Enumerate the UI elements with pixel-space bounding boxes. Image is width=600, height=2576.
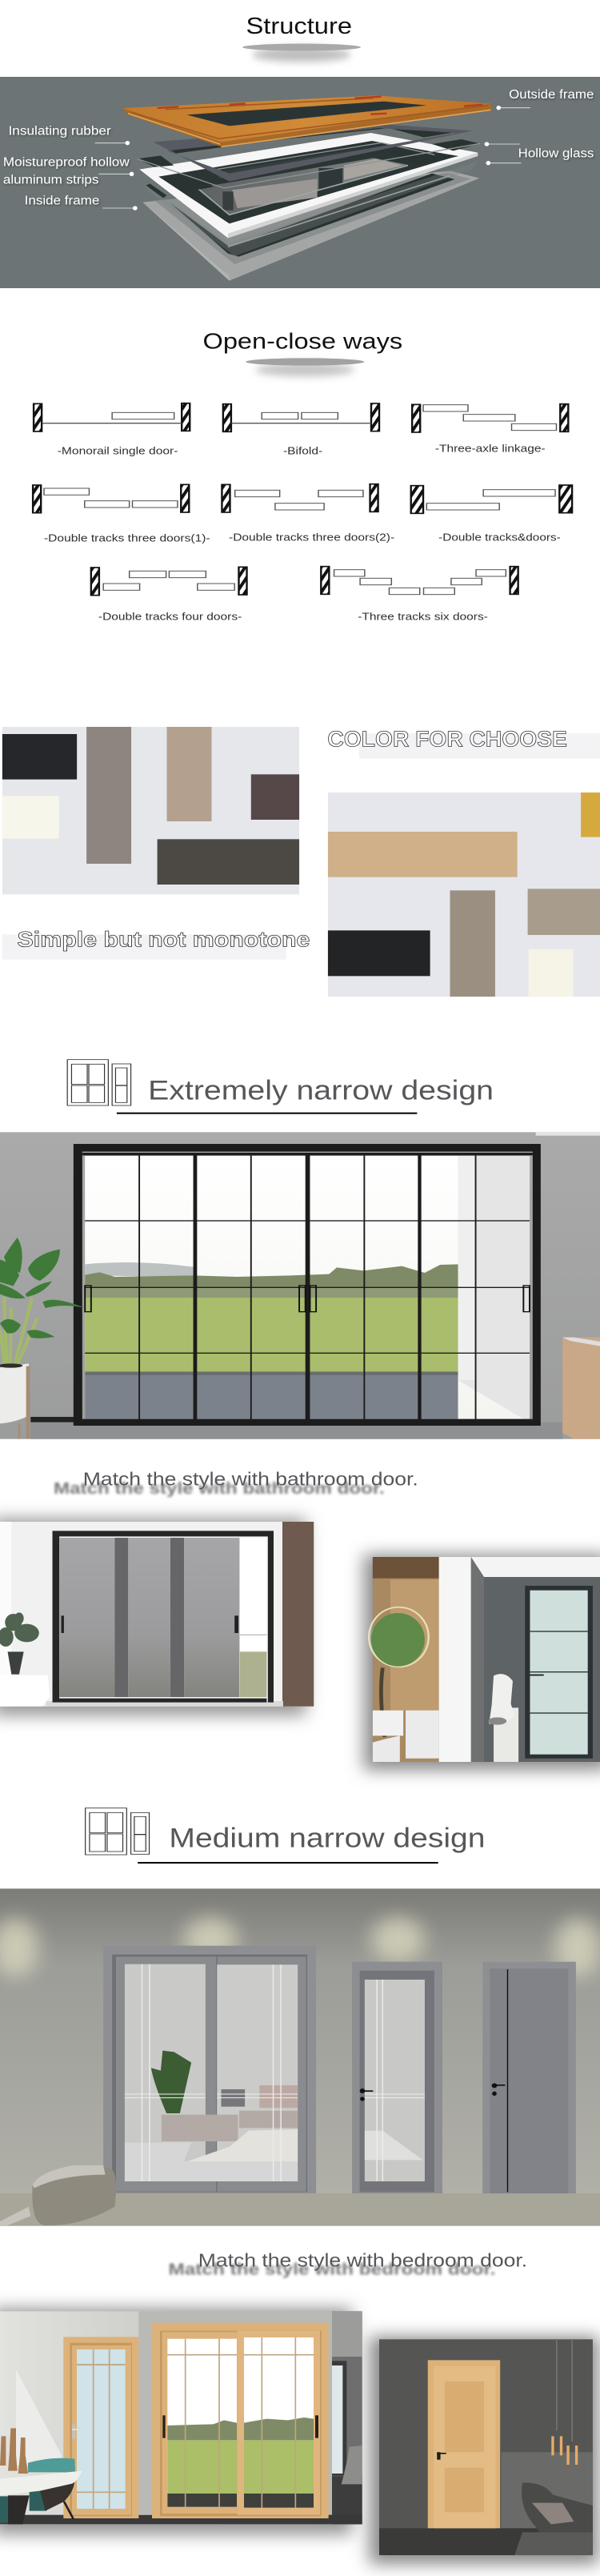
diagram: double tracks and doors: -Double tracks&doors- [438, 532, 561, 544]
icon: door and window [86, 1808, 150, 1855]
label: Moistureproof hollow aluminum strips: Moistureproof hollow [3, 155, 130, 169]
underline [138, 1862, 438, 1864]
photo: wood doors dining room [0, 2311, 362, 2524]
window view [85, 1156, 530, 1419]
label band: simple but not monotone [2, 934, 286, 960]
armchair [514, 2483, 593, 2555]
label: Outside frame [496, 88, 594, 110]
diagram: monorail single door: -Monorail single door- [58, 445, 178, 457]
heading: Simple but not monotone: Simple but not monotone [18, 927, 310, 951]
photo: hallway bathroom door [369, 1557, 600, 1762]
title: Structure: Structure [246, 14, 352, 39]
diagram: double tracks three doors 1 [33, 484, 210, 544]
door frame [74, 1144, 541, 1426]
photo shadow [370, 2336, 599, 2564]
carpet floor [0, 2193, 600, 2226]
diagram: double tracks four doors [91, 567, 247, 623]
upper hollow glass layer [138, 139, 480, 192]
panel: right swatches [328, 792, 600, 997]
photo shadow [0, 2308, 352, 2535]
photo: black sliding door [0, 1132, 600, 1439]
diagram: double tracks three doors 2 [222, 484, 394, 544]
door handles [85, 1286, 530, 1312]
label: Hollow glass [485, 142, 594, 165]
caption: bathroom door: Match the style with bathroom door. [83, 1469, 418, 1490]
diagram: exploded frame layers [122, 95, 492, 281]
blanket [342, 2446, 362, 2484]
reflected caption shadow: Match the style with bedroom door. [168, 2261, 495, 2279]
sliding wood door [152, 2323, 329, 2518]
insulating rubber layer [154, 124, 472, 182]
diagram: double tracks three doors 2: -Double tracks three doors(2)- [229, 532, 394, 544]
double sliding door [103, 1946, 316, 2194]
diagram: monorail single door [34, 403, 190, 457]
section: bathroom door match [0, 1469, 600, 1855]
inside frame layer [142, 171, 479, 281]
section: medium narrow photo [0, 1862, 600, 2226]
label: Inside frame: Inside frame [25, 195, 99, 208]
diagram: three-axle linkage [412, 404, 568, 455]
underline [117, 1113, 417, 1114]
photo: gray doors on wall [0, 1888, 600, 2226]
diagram: bifold: -Bifold- [283, 445, 322, 457]
single glass door [352, 1962, 442, 2194]
caption: bedroom door: Match the style with bedroom door. [198, 2250, 527, 2271]
single glass door [63, 2337, 138, 2518]
reflected caption shadow: Match the style with bathroom door. [54, 1480, 385, 1498]
diagram: double tracks and doors [411, 485, 572, 544]
title ellipse shadow [242, 43, 361, 62]
heading: Medium narrow design: Medium narrow design [169, 1823, 486, 1853]
title ellipse shadow [246, 358, 364, 376]
section: open-close ways [33, 329, 572, 623]
photo: gray sliding door [0, 1522, 314, 1707]
panel: left swatches [2, 727, 299, 894]
plant with planter [0, 1238, 86, 1438]
section: structure [0, 14, 600, 288]
wall spotlights [0, 1917, 600, 1977]
label: Moistureproof hollow aluminum strips [3, 155, 134, 187]
section: colors [2, 727, 600, 997]
pendant lights [551, 2340, 578, 2465]
section: bedroom door match [0, 2250, 599, 2564]
photo: bedroom wood door [379, 2339, 593, 2555]
section: extremely narrow design [0, 1060, 600, 1439]
diagram: three tracks six doors [321, 567, 518, 623]
dining table and chair [0, 2428, 82, 2524]
icon: door and window [67, 1060, 131, 1105]
diagram: double tracks four doors: -Double tracks four doors- [98, 611, 242, 623]
panel: exploded frame diagram [0, 77, 600, 288]
statue [488, 1674, 518, 1762]
label: Moistureproof hollow aluminum strips: aluminum strips [3, 173, 98, 187]
frame interior reflection [158, 141, 458, 223]
diagram: three tracks six doors: -Three tracks six doors- [358, 611, 488, 623]
diagram: bifold [223, 403, 379, 457]
title: Open-close ways: Open-close ways [203, 329, 402, 354]
lower hollow glass layer [144, 162, 478, 257]
label: Insulating rubber [9, 124, 130, 145]
label band: color for choose [359, 733, 600, 759]
photo shadow [363, 1555, 600, 1771]
label: Insulating rubber: Insulating rubber [9, 124, 111, 138]
flush wood door [482, 1962, 576, 2194]
heading: Extremely narrow design: Extremely narrow design [148, 1075, 494, 1105]
vase plant [0, 1612, 50, 1707]
ottoman with blanket [0, 2165, 116, 2225]
diagram: three-axle linkage: -Three-axle linkage- [435, 443, 546, 455]
outside wood frame [122, 95, 492, 146]
diagram: double tracks three doors 1: -Double tracks three doors(1)- [44, 532, 210, 544]
labels group [3, 88, 594, 211]
cabinet [562, 1338, 600, 1439]
room sofa and plant [151, 2051, 298, 2161]
photo shadow [0, 1519, 306, 1715]
white spacer frame [139, 133, 478, 238]
